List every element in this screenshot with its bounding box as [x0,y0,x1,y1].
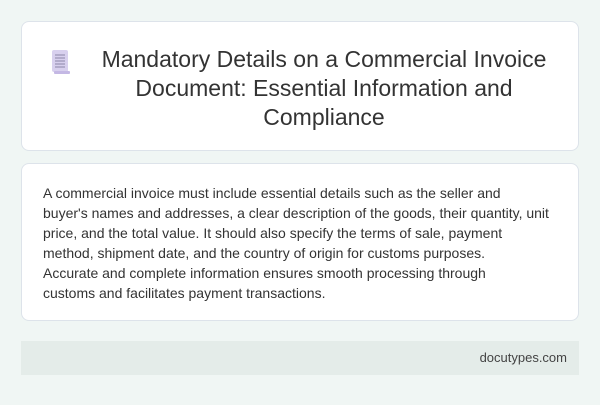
footer [21,341,579,375]
text block: method, shipment date, and the country of origin for customs purposes. [43,245,485,261]
text block: buyer's names and addresses, a clear description of the goods, their quantity, unit [43,205,549,221]
text block [43,185,549,301]
footer text: docutypes.com [480,350,567,365]
text block: A commercial invoice must include essential details such as the seller and [43,185,501,201]
text block: customs and facilitates payment transactions. [43,285,325,301]
icon: document [52,50,70,74]
text block: Accurate and complete information ensures smooth processing through [43,265,486,281]
title: Mandatory Details on a Commercial Invoice Document: Essential Information and Compliance [102,46,546,130]
panel: title card [21,21,579,151]
panel: description [21,163,579,321]
text block: price, and the total value. It should also specify the terms of sale, payment [43,225,502,241]
